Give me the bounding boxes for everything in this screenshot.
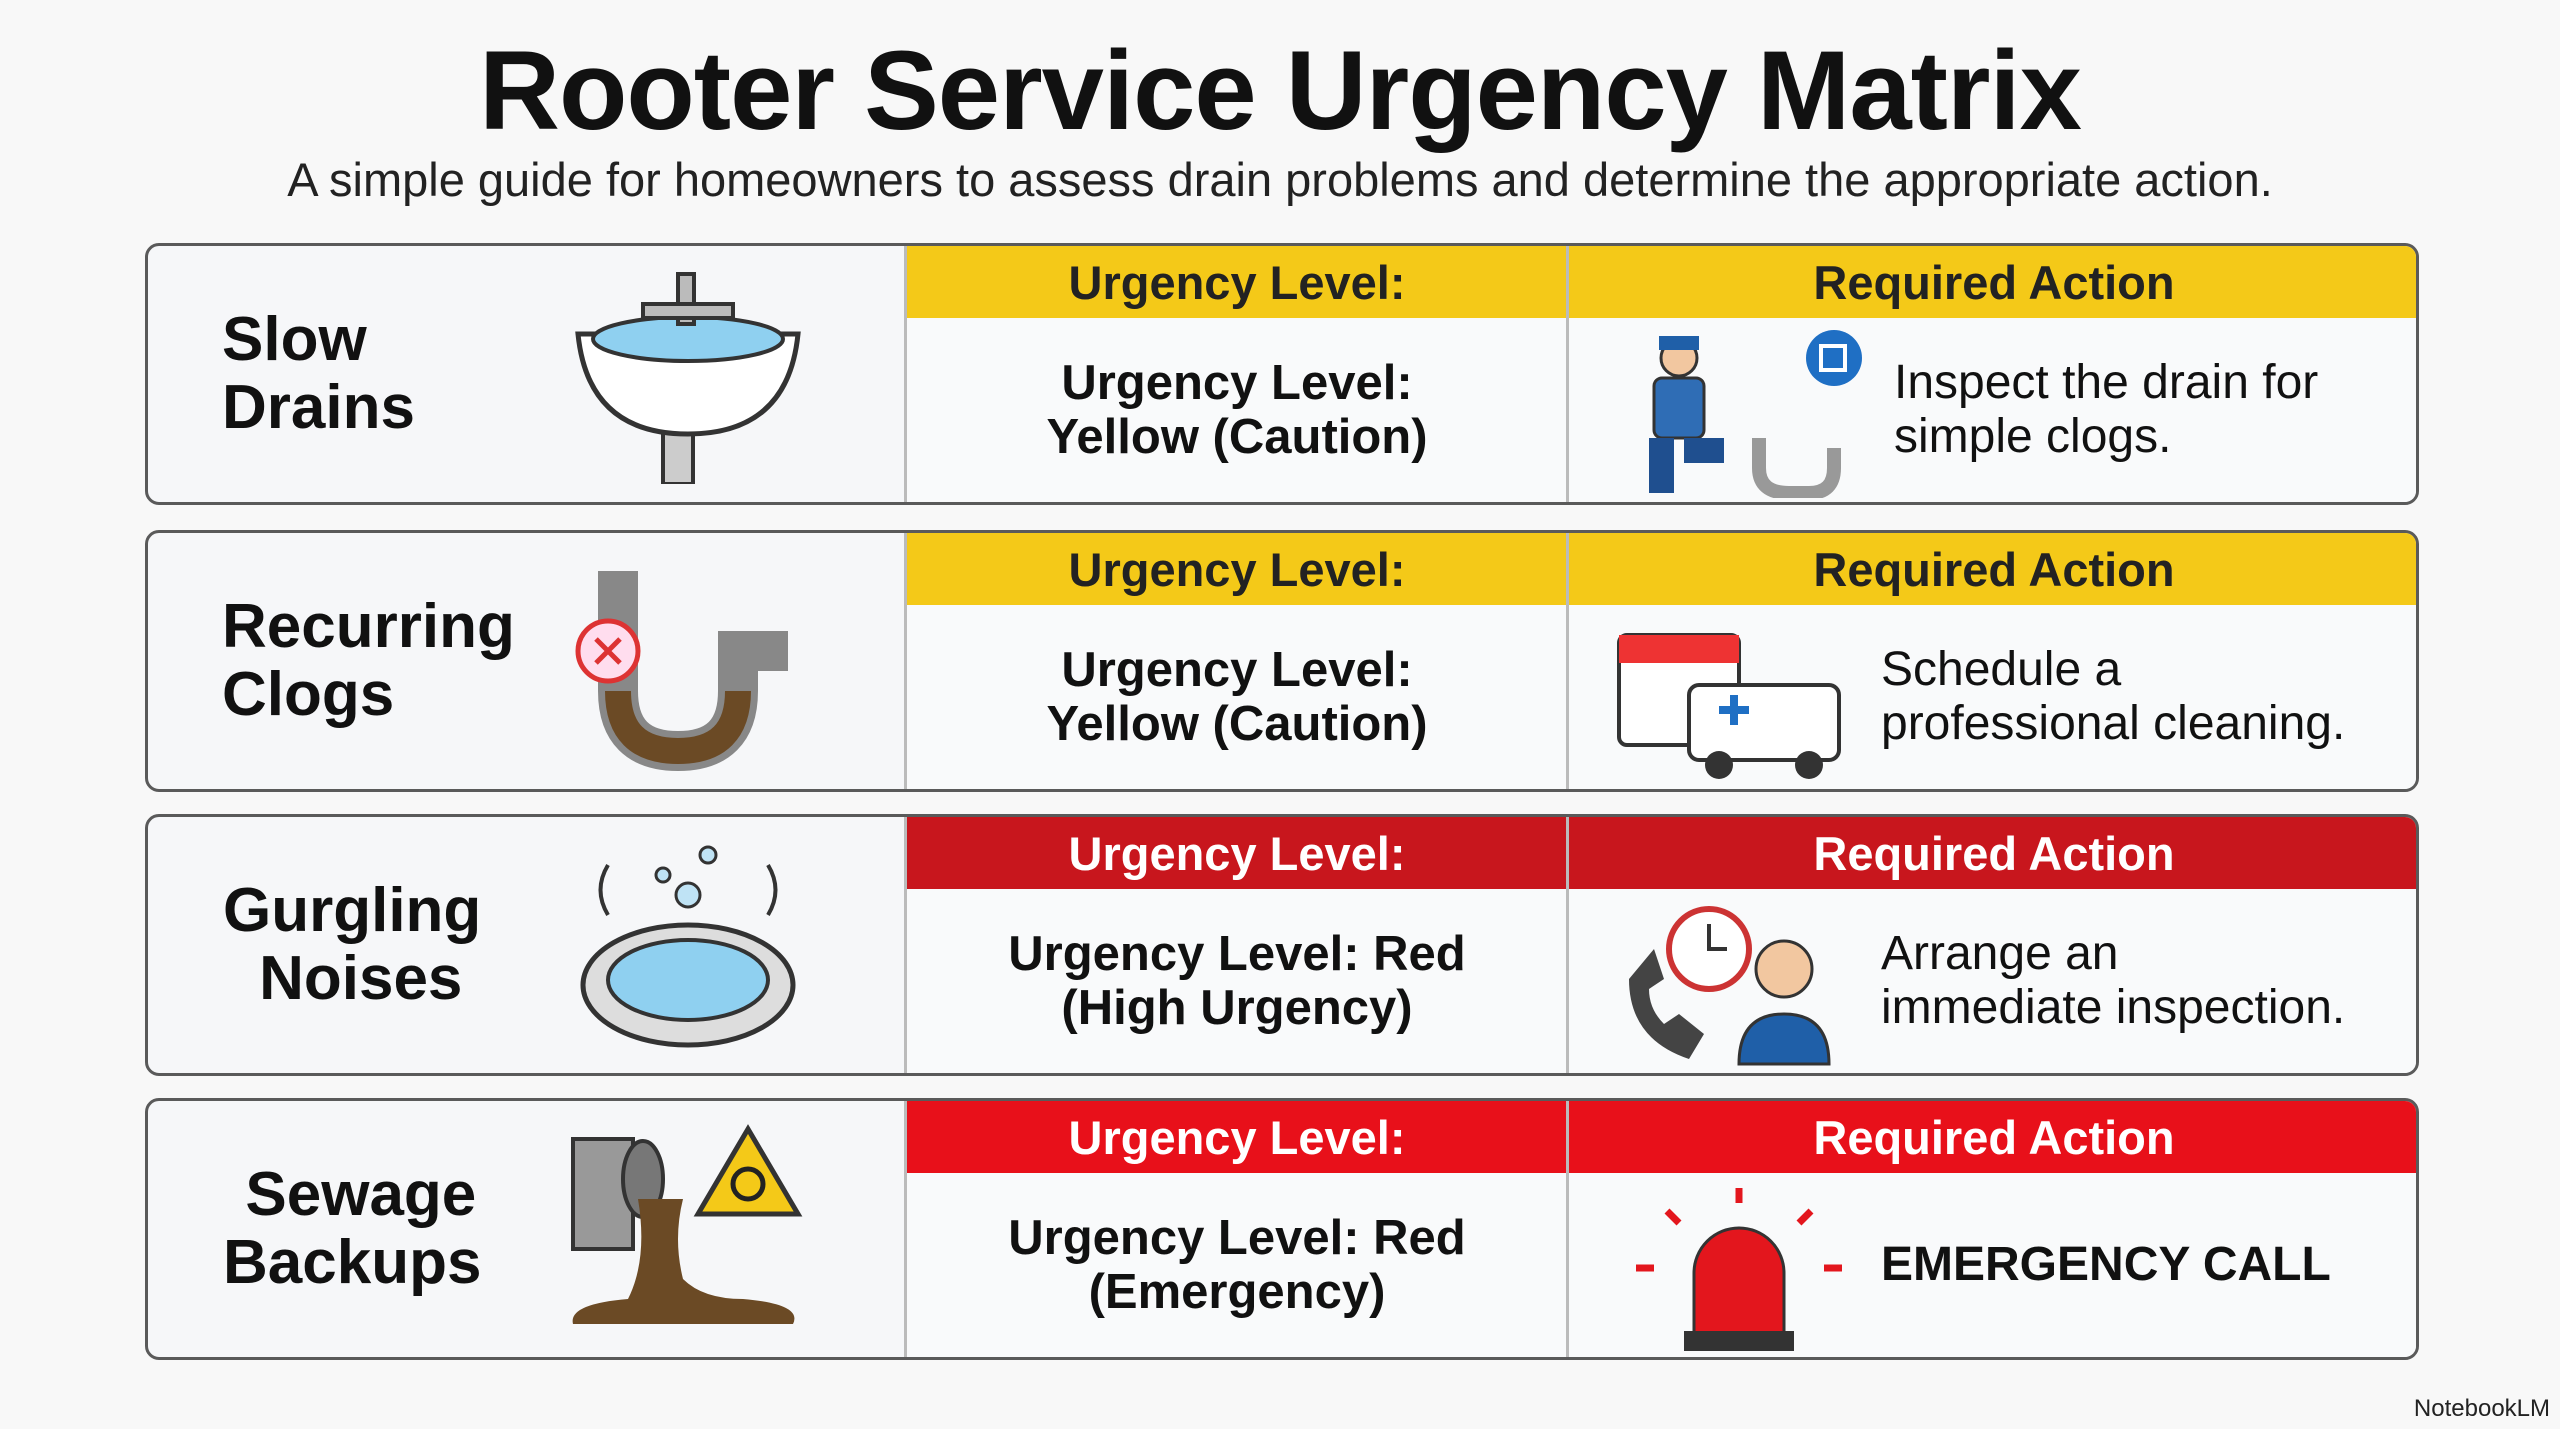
action cell xyxy=(1566,1101,2419,1357)
icon: phone clock agent xyxy=(1629,906,1830,1066)
icon: calendar and van xyxy=(1617,633,1841,779)
watermark: NotebookLM xyxy=(2414,1395,2550,1422)
action text: Arrange an xyxy=(1881,927,2118,980)
row: sewage backups xyxy=(145,1098,2419,1360)
urgency cell: Urgency Level: xyxy=(1069,542,1405,596)
label xyxy=(223,1160,481,1297)
label xyxy=(222,305,415,442)
action cell: Required Action xyxy=(1813,542,2175,596)
icon: plumber xyxy=(1649,330,1862,498)
action text: immediate inspection. xyxy=(1881,981,2345,1034)
action cell: Required Action xyxy=(1813,1110,2175,1164)
label: Backups xyxy=(223,1228,481,1297)
action text: EMERGENCY CALL xyxy=(1881,1238,2331,1291)
action text: professional cleaning. xyxy=(1881,697,2345,750)
urgency cell: Yellow (Caution) xyxy=(1046,697,1428,751)
urgency cell: Urgency Level: xyxy=(1069,826,1405,880)
action text: Inspect the drain for xyxy=(1894,356,2318,409)
action cell: Required Action xyxy=(1813,256,2175,308)
icon: sewage and biohazard xyxy=(571,1124,802,1324)
title: Rooter Service Urgency Matrix xyxy=(479,28,2081,153)
label: Slow xyxy=(222,305,367,374)
action text: simple clogs. xyxy=(1894,410,2171,463)
action text xyxy=(1894,356,2318,463)
icon: drain with bubbles xyxy=(580,846,796,1048)
icon: pipe with x xyxy=(576,571,788,771)
label xyxy=(223,876,481,1013)
subtitle: A simple guide for homeowners to assess drain problems and determine the appropriate action. xyxy=(287,153,2273,206)
label: Sewage xyxy=(245,1160,476,1229)
label xyxy=(222,592,515,729)
urgency cell: Yellow (Caution) xyxy=(1046,410,1428,464)
action text xyxy=(1881,643,2345,750)
row: gurgling noises xyxy=(145,814,2419,1076)
urgency cell xyxy=(904,246,1567,502)
label: Recurring xyxy=(222,592,515,661)
action cell xyxy=(1566,533,2419,789)
urgency cell: Urgency Level: xyxy=(1069,256,1405,308)
urgency cell: (High Urgency) xyxy=(1061,981,1413,1035)
label: Clogs xyxy=(222,660,394,729)
label: Drains xyxy=(222,373,415,442)
label: Noises xyxy=(259,944,462,1013)
urgency cell: Urgency Level: xyxy=(1061,356,1413,410)
row: slow drains xyxy=(145,243,2419,505)
urgency cell xyxy=(904,1101,1567,1357)
urgency cell xyxy=(904,817,1567,1073)
action text: Schedule a xyxy=(1881,643,2121,696)
urgency cell: (Emergency) xyxy=(1089,1265,1385,1319)
urgency cell: Urgency Level: Red xyxy=(1008,927,1466,981)
urgency cell: Urgency Level: xyxy=(1069,1110,1405,1164)
label: Gurgling xyxy=(223,876,481,945)
action cell xyxy=(1566,246,2419,502)
row: recurring clogs xyxy=(145,530,2419,792)
action cell: Required Action xyxy=(1813,826,2175,880)
urgency cell: Urgency Level: Red xyxy=(1008,1211,1466,1265)
urgency cell: Urgency Level: xyxy=(1061,643,1413,697)
action cell xyxy=(1566,817,2419,1073)
icon: siren xyxy=(1636,1188,1842,1351)
icon: sink xyxy=(575,272,801,484)
urgency cell xyxy=(904,533,1567,789)
action text xyxy=(1881,927,2345,1034)
